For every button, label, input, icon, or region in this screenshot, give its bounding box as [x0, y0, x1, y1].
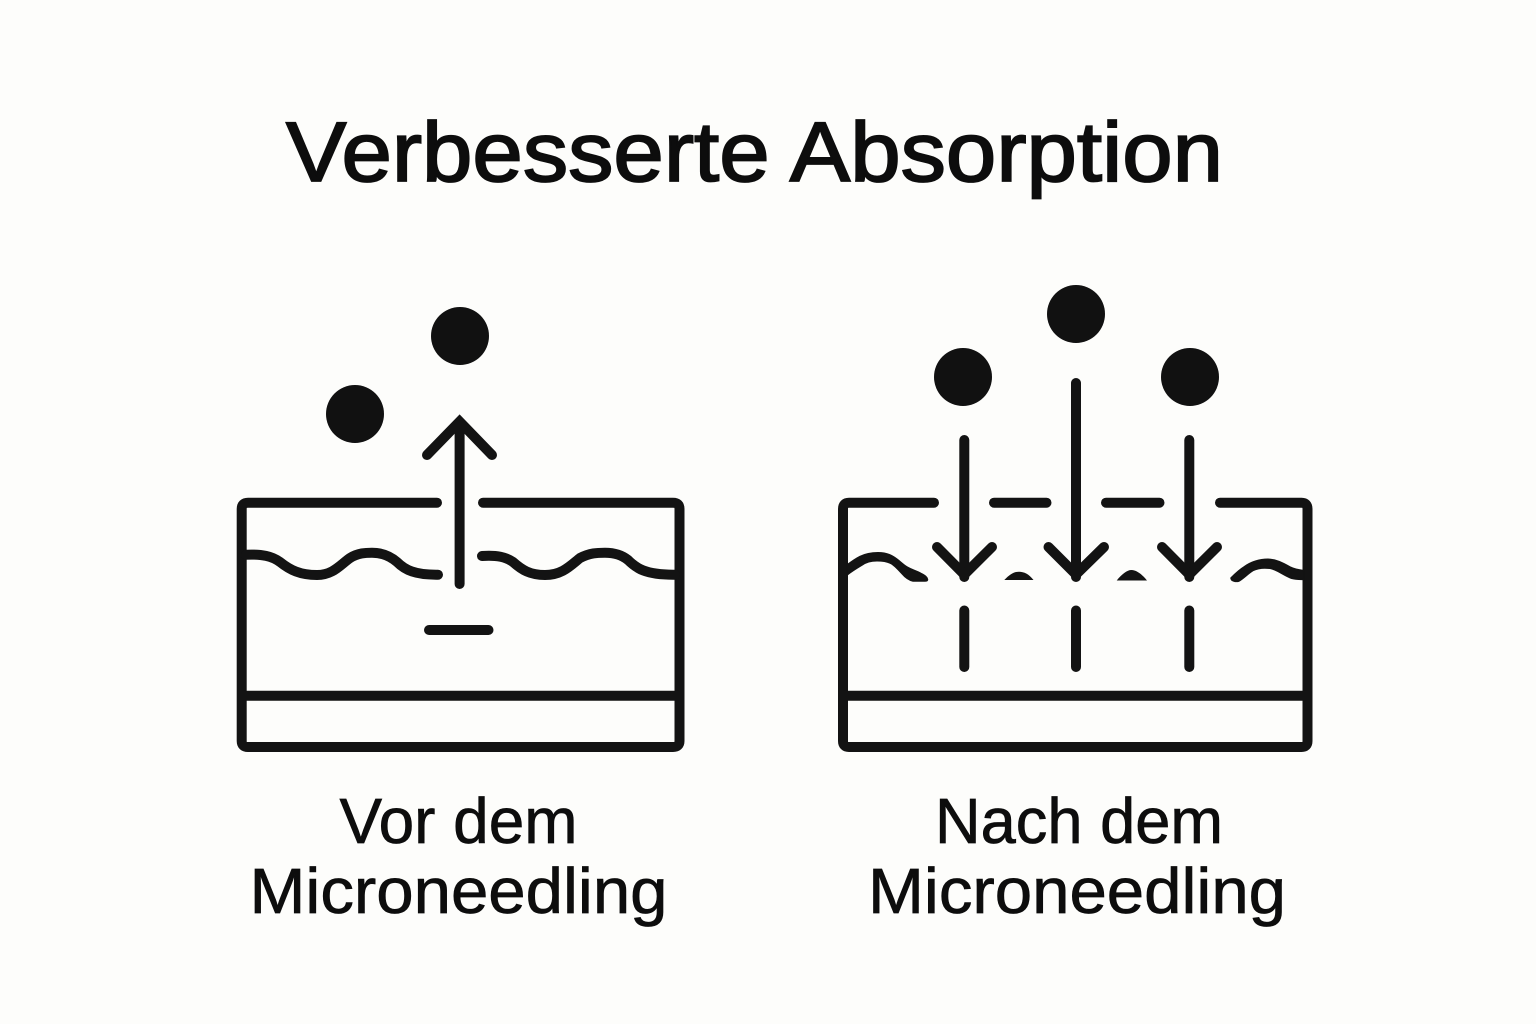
skin lower layer line: [843, 691, 1308, 701]
title: Verbesserte Absorption: [286, 105, 1223, 199]
particle left: [934, 348, 992, 406]
skin lower layer line: [242, 691, 679, 701]
label: microneedling left: Microneedling: [250, 855, 668, 927]
particle top: [431, 307, 489, 365]
channels: [964, 610, 1189, 667]
arrow centre: [1048, 383, 1104, 577]
dash below arrow: [429, 625, 488, 635]
skin surface wave right: [482, 553, 675, 575]
particle left: [326, 385, 384, 443]
wave fragments: [1004, 570, 1147, 580]
particle right: [1161, 348, 1219, 406]
top surface dashes: [994, 498, 1160, 508]
particle centre: [1047, 285, 1105, 343]
skin box outline: [242, 503, 679, 747]
arrow right: [1162, 440, 1217, 577]
label: before: Vor dem: [340, 785, 578, 857]
label: microneedling right: Microneedling: [868, 855, 1286, 927]
label: after: Nach dem: [935, 785, 1223, 857]
skin wave right: [1231, 559, 1304, 581]
skin surface wave left: [246, 553, 438, 575]
arrow left: [937, 440, 992, 577]
panel: before microneedling: [242, 422, 679, 747]
skin box outline: [843, 503, 1308, 747]
upward arrow: [427, 422, 492, 584]
skin wave left: [847, 553, 928, 581]
panel: after microneedling: [843, 383, 1308, 747]
